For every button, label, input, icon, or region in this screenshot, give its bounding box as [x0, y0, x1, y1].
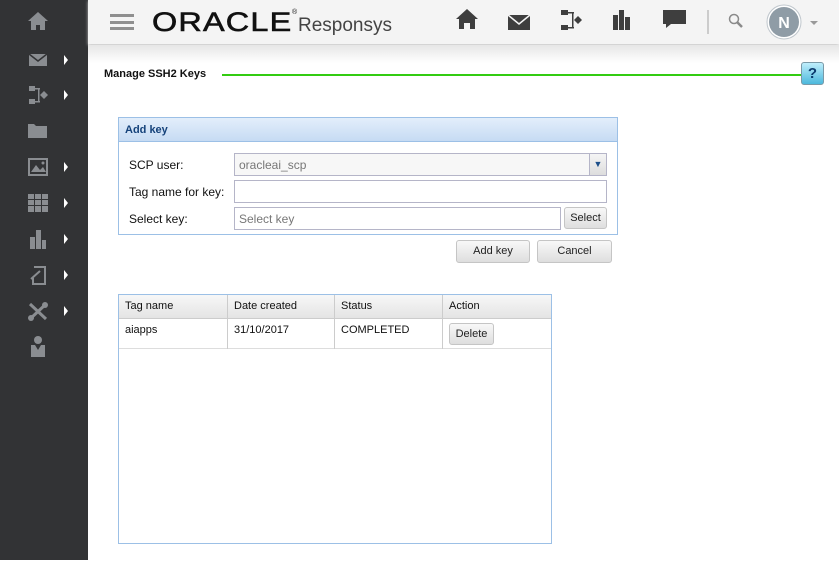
- button: select: Select: [570, 212, 601, 224]
- title: Manage SSH2 Keys: [104, 68, 206, 80]
- panel: add key: SCP user:: [129, 158, 183, 172]
- icon: hamburger menu: [110, 14, 134, 30]
- select: scp user: [234, 153, 607, 176]
- table: keys: Action: [449, 300, 480, 312]
- button: delete: [449, 323, 494, 345]
- input: tag name: [234, 180, 607, 203]
- input: select key: Select key: [239, 212, 294, 226]
- page shade: [88, 45, 839, 63]
- input: select key: [234, 207, 561, 230]
- button: cancel: [537, 240, 612, 263]
- icon: table: [28, 194, 48, 212]
- help button: [801, 62, 824, 85]
- icon: tools: [28, 302, 48, 321]
- logo: ®: [292, 9, 297, 16]
- icon: chart: [30, 230, 46, 249]
- icon: image: [28, 158, 48, 176]
- logo: Responsys: [298, 15, 392, 36]
- table: keys: Status: [341, 300, 372, 312]
- top nav icons: [456, 4, 818, 40]
- table: keys: 31/10/2017: [234, 324, 289, 336]
- top nav icons: N: [778, 15, 790, 32]
- table: keys: Date created: [234, 300, 297, 312]
- panel: add key: [118, 117, 618, 235]
- button: add key: [456, 240, 530, 263]
- select: scp user: ▼: [594, 159, 602, 169]
- panel: add key: Tag name for key:: [129, 185, 224, 199]
- table: keys: COMPLETED: [341, 324, 409, 336]
- header bar: [88, 0, 839, 44]
- table: keys: aiapps: [125, 324, 157, 336]
- button: add key: Add key: [473, 245, 513, 257]
- logo: ORACLE: [152, 7, 292, 37]
- button: cancel: Cancel: [557, 245, 592, 257]
- icon: form: [31, 267, 45, 284]
- sidebar: [0, 0, 88, 560]
- table: keys: Tag name: [125, 300, 173, 312]
- panel: add key: Select key:: [129, 212, 188, 226]
- icon: program: [29, 86, 48, 104]
- panel heading: [119, 118, 617, 142]
- arrows: [64, 55, 68, 316]
- button: delete: Delete: [456, 328, 487, 340]
- icon: home: [28, 12, 48, 30]
- select: scp user: oracleai_scp: [239, 158, 306, 172]
- button: select: [564, 207, 607, 229]
- icon: user: [31, 336, 45, 357]
- icon: mail: [29, 54, 47, 66]
- logo: [152, 7, 392, 37]
- panel heading: Add key: [125, 124, 168, 136]
- table: keys: [118, 294, 552, 544]
- icon: folder: [28, 124, 47, 138]
- help button: ?: [808, 65, 817, 82]
